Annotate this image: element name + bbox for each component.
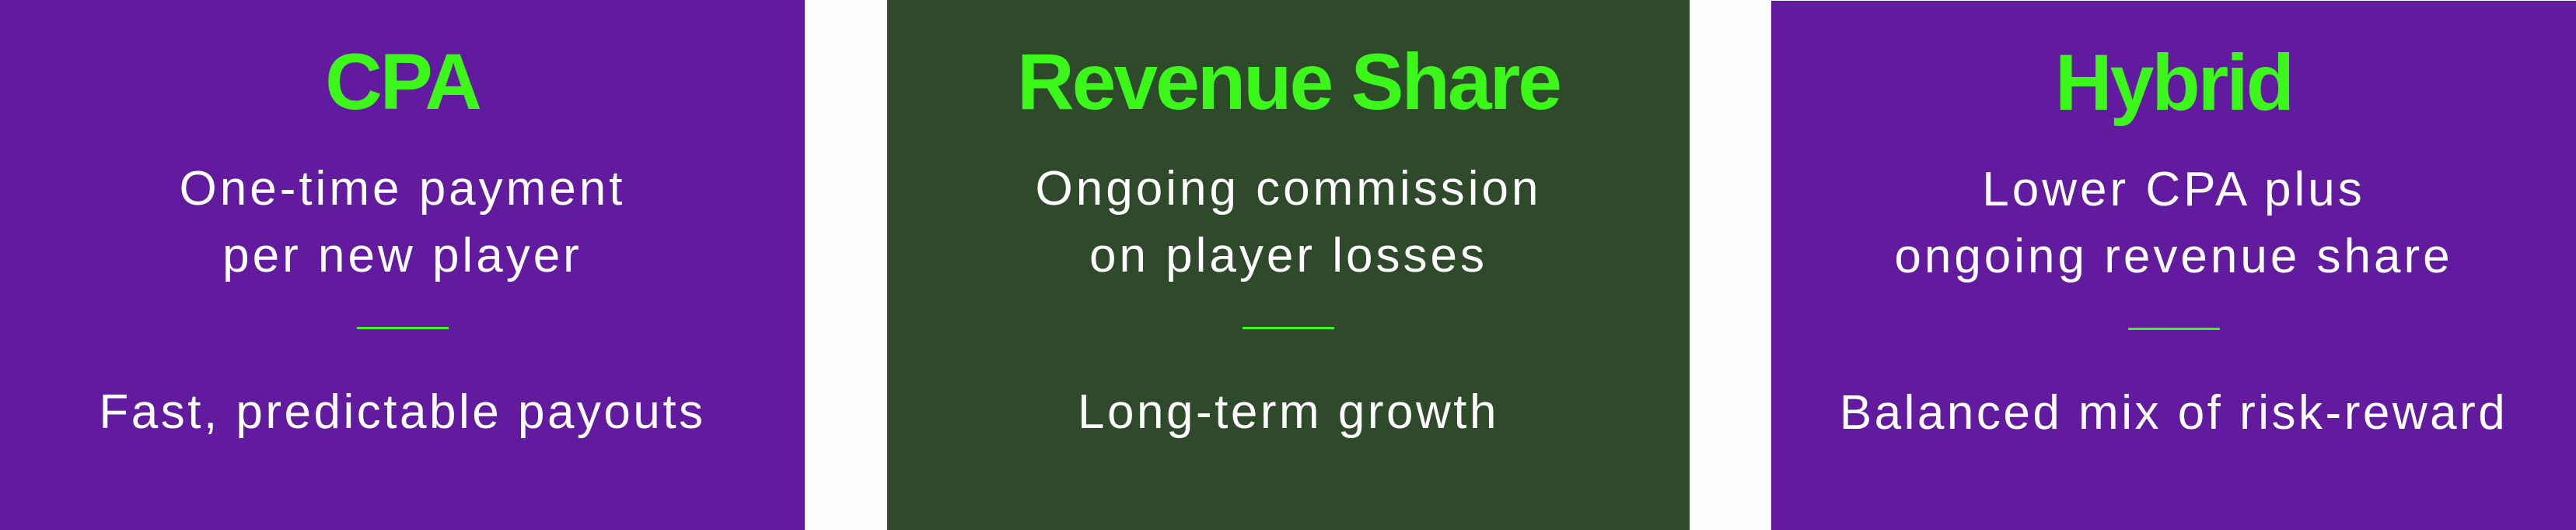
text: Revenue Share benefit: Long-term growth	[1078, 385, 1499, 439]
heading: CPA: CPA	[325, 37, 480, 126]
text: Revenue Share description: on player losses	[1089, 229, 1487, 283]
panel: Revenue Share	[887, 0, 1690, 530]
heading: Hybrid: Hybrid	[2055, 38, 2292, 127]
text: Revenue Share description: Ongoing commission	[1036, 162, 1541, 216]
text: Hybrid description: Lower CPA plus	[1982, 163, 2365, 216]
divider: Revenue Share	[1243, 327, 1334, 329]
text: Hybrid description	[1894, 163, 2453, 283]
text: Hybrid description: ongoing revenue share	[1894, 230, 2453, 283]
text: Revenue Share description	[1036, 162, 1541, 283]
text: CPA description	[179, 162, 625, 283]
panel: Hybrid	[1771, 1, 2576, 530]
panel: CPA	[0, 0, 805, 530]
heading: Revenue Share: Revenue Share	[1017, 37, 1560, 126]
text: CPA description: per new player	[222, 229, 582, 283]
text: CPA description: One-time payment	[179, 162, 625, 216]
text: Hybrid benefit: Balanced mix of risk-reward	[1840, 386, 2508, 440]
divider: CPA	[356, 327, 448, 329]
text: CPA benefit: Fast, predictable payouts	[99, 385, 706, 439]
divider: Hybrid	[2127, 328, 2219, 330]
